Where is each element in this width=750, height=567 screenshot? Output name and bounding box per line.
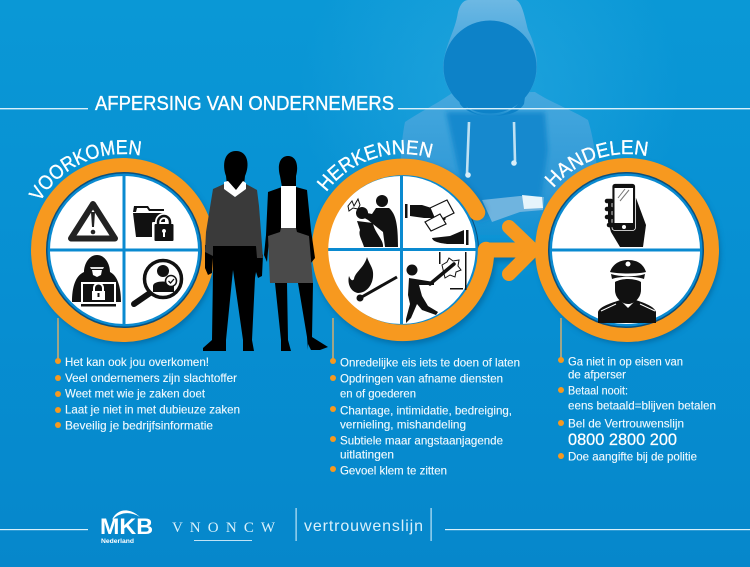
list: herkennen: vernieling, mishandeling <box>340 418 466 432</box>
list: voorkomen: Het kan ook jou overkomen! <box>65 355 209 369</box>
list: voorkomen: Weet met wie je zaken doet <box>65 386 206 400</box>
list: handelen: Betaal nooit: <box>568 384 628 398</box>
logo: vno ncw: V N O N C W <box>172 520 276 536</box>
list: voorkomen: Beveilig je bedrijfsinformatie <box>65 418 213 432</box>
heading: voorkomen: VOORKOMEN <box>28 140 141 198</box>
icon: hand holding phone <box>607 184 646 247</box>
list: handelen <box>558 354 716 464</box>
icon: warning triangle <box>71 204 115 238</box>
logo: vertrouwenslijn <box>296 508 432 541</box>
list: herkennen: Gevoel klem te zitten <box>340 464 447 478</box>
background glow <box>0 0 750 300</box>
logo: mkb nederland: Nederland <box>101 538 134 545</box>
icon: police officer <box>598 260 656 323</box>
icon: hacker with laptop <box>72 255 121 306</box>
list: handelen: Ga niet in op eisen van <box>568 354 683 368</box>
list: voorkomen: Veel ondernemers zijn slachtoffer <box>65 371 237 385</box>
list: herkennen: Subtiele maar angstaanjagende <box>340 434 503 448</box>
list: herkennen: Chantage, intimidatie, bedreiging, <box>340 404 512 418</box>
list: herkennen <box>330 356 520 478</box>
icon: person with baseball bat <box>406 252 466 323</box>
icon: money changing hands <box>405 200 468 245</box>
title: AFPERSING VAN ONDERNEMERS <box>95 93 394 115</box>
list: herkennen: en of goederen <box>340 386 416 400</box>
connector lines <box>58 318 561 361</box>
list: herkennen: uitlatingen <box>340 448 394 462</box>
silhouette: woman <box>264 156 328 351</box>
ring: handelen <box>535 158 720 344</box>
logo: vertrouwenslijn: vertrouwenslijn <box>304 518 423 535</box>
logo: mkb nederland <box>100 510 153 545</box>
list: herkennen: Opdringen van afname diensten <box>340 372 503 386</box>
icon: burning match <box>348 257 397 302</box>
panel: voorkomen <box>28 140 213 346</box>
list: handelen: 0800 2800 200 <box>568 430 677 449</box>
panel: herkennen <box>312 140 536 346</box>
heading: herkennen: HERKENNEN <box>316 140 433 192</box>
icon: magnifier with person <box>134 260 182 304</box>
hooded extortionist figure <box>398 0 602 235</box>
panel: handelen <box>535 140 722 346</box>
icon: assault <box>348 195 398 247</box>
list: voorkomen <box>55 355 240 432</box>
silhouette: man <box>203 151 263 351</box>
heading: handelen: HANDELEN <box>544 140 648 188</box>
ring with arrow: herkennen <box>320 167 536 336</box>
ring: voorkomen <box>31 158 216 344</box>
arrow to handelen <box>509 227 533 274</box>
list: handelen: de afperser <box>568 368 626 382</box>
footer rules <box>0 529 750 530</box>
list: voorkomen: Laat je niet in met dubieuze zaken <box>65 402 240 416</box>
list: handelen: Bel de Vertrouwenslijn <box>568 416 684 430</box>
icon: folder with lock <box>133 206 176 243</box>
list: herkennen: Onredelijke eis iets te doen of laten <box>340 356 520 370</box>
title rule right <box>398 108 750 109</box>
list: handelen: Doe aangifte bij de politie <box>568 450 697 464</box>
list: handelen: eens betaald=blijven betalen <box>568 398 716 412</box>
logo: mkb nederland: MKB <box>100 514 153 539</box>
title rule left <box>0 108 88 109</box>
